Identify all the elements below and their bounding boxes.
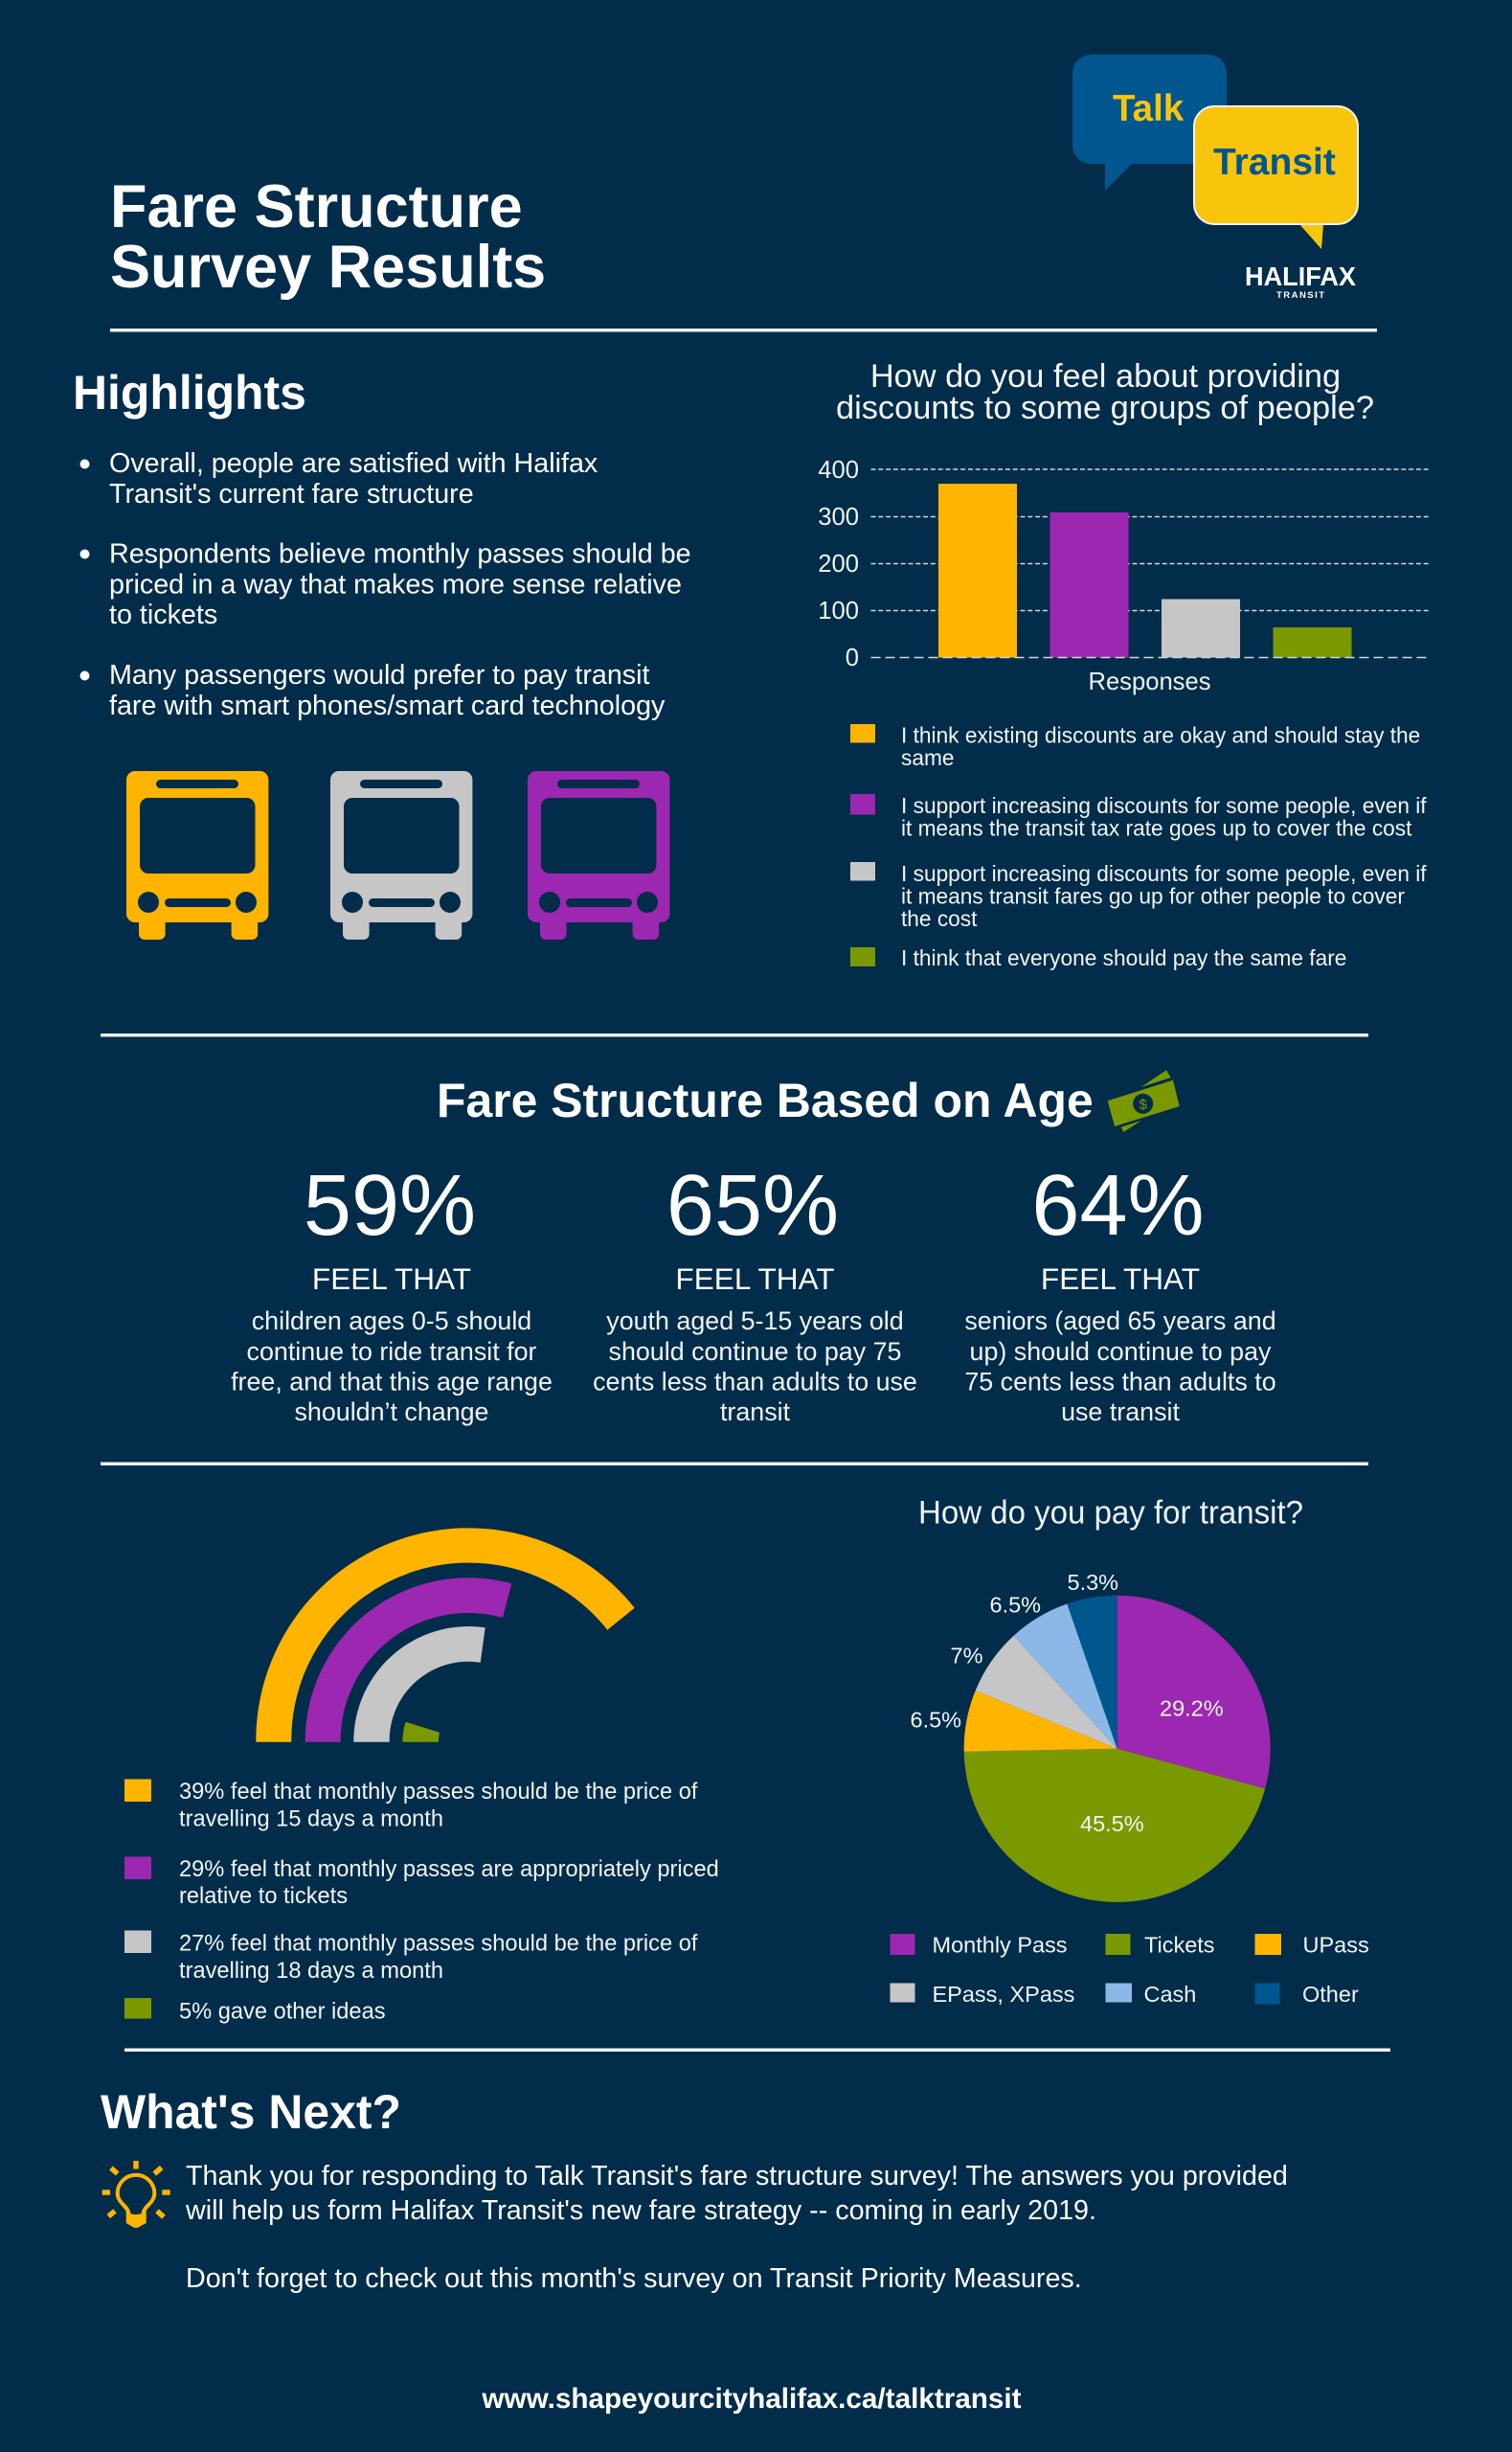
icon: money <box>1108 1070 1180 1132</box>
pie chart: 6.5% <box>990 1592 1041 1617</box>
text block: thank you: Don't forget to check out this month's survey on Transit Priority Measures. <box>186 2263 1082 2294</box>
bullet: smart phones: Many passengers would prefer to pay transit <box>109 660 650 691</box>
heading: Fare Structure Based on Age <box>437 1074 1094 1127</box>
legend: discounts: I think existing discounts are okay and should stay the <box>901 722 1420 747</box>
heading: Highlights: Highlights <box>73 366 306 420</box>
stat: 59%: FEEL THAT <box>312 1261 471 1296</box>
website link: www.shapeyourcityhalifax.ca/talktransit <box>481 2383 1022 2415</box>
legend: monthly pass opinions: travelling 15 days a month <box>179 1806 443 1831</box>
legend: monthly pass opinions: travelling 18 days a month <box>179 1959 443 1984</box>
bullet: smart phones: fare with smart phones/smart card technology <box>109 691 666 721</box>
stat: 65%: 65% <box>666 1158 839 1254</box>
icon: grey bus <box>330 771 472 940</box>
logo: Talk Transit Halifax <box>1072 55 1358 301</box>
legend: monthly pass opinions: 39% feel that monthly passes should be the price of <box>179 1780 698 1805</box>
legend: monthly pass opinions <box>124 1780 719 2025</box>
radial bar chart <box>256 1528 635 1742</box>
stat: 65% <box>593 1158 917 1426</box>
stat: 65%: cents less than adults to use <box>593 1368 917 1396</box>
pie chart: 7% <box>950 1644 983 1669</box>
text block: thank you: will help us form Halifax Transit's new fare strategy -- coming in early 2019. <box>185 2195 1096 2226</box>
text block: thank you: Thank you for responding to Talk Transit's fare structure survey! The answers you provided <box>186 2161 1288 2191</box>
bar chart: 400 <box>818 457 859 484</box>
bar chart <box>818 457 1429 695</box>
stat: 64% <box>964 1158 1276 1426</box>
stat: 59% <box>231 1158 553 1426</box>
legend: monthly pass opinions: 29% feel that monthly passes are appropriately priced <box>179 1857 719 1882</box>
pie chart: 5.3% <box>1067 1570 1118 1595</box>
legend: discounts: the cost <box>901 906 978 931</box>
stat: 64%: up) should continue to pay <box>970 1337 1272 1366</box>
bullet: satisfied: Transit's current fare structure <box>109 479 474 510</box>
legend: payment types <box>891 1933 1369 2007</box>
legend: discounts: I support increasing discounts for some people, even if <box>901 861 1427 886</box>
bullet: monthly passes: Respondents believe monthly passes should be <box>109 538 691 569</box>
legend: discounts: I support increasing discounts for some people, even if <box>901 793 1427 818</box>
bar chart: 300 <box>818 504 859 531</box>
title: Survey Results <box>110 234 546 301</box>
pie chart: 45.5% <box>1080 1811 1144 1836</box>
pie chart: 29.2% <box>1160 1695 1224 1720</box>
icon: money: $ <box>1140 1097 1148 1113</box>
title <box>110 173 546 301</box>
stat: 59%: 59% <box>304 1158 476 1254</box>
stat: 65%: should continue to pay 75 <box>609 1337 901 1366</box>
stat: 59%: shouldn’t change <box>295 1397 488 1426</box>
heading: What's Next? <box>101 2085 401 2139</box>
legend: payment types: UPass <box>1302 1933 1369 1958</box>
bullet: monthly passes: priced in a way that makes more sense relative <box>109 569 682 600</box>
legend: discounts: it means the transit tax rate goes up to cover the cost <box>901 816 1412 841</box>
Halifax Transit wordmark: TRANSIT <box>1276 290 1324 301</box>
pie chart: 6.5% <box>910 1707 961 1732</box>
legend: payment types: Cash <box>1143 1982 1196 2007</box>
bullet: monthly passes: to tickets <box>109 600 217 630</box>
stat: 64%: 75 cents less than adults to <box>964 1368 1276 1396</box>
pie chart <box>910 1570 1271 1902</box>
panel: discounts survey <box>818 358 1429 970</box>
panel: highlights <box>73 366 691 940</box>
chart title: How do you pay for transit? <box>918 1494 1303 1531</box>
speech bubble: Talk: Talk <box>1113 88 1185 129</box>
legend: discounts: same <box>901 745 954 770</box>
bullet: monthly passes <box>80 538 691 630</box>
legend: payment types: EPass, XPass <box>933 1982 1074 2007</box>
legend: payment types: Other <box>1302 1982 1359 2007</box>
legend: discounts <box>850 722 1427 970</box>
bar chart: Responses <box>1088 669 1211 695</box>
stat: 64%: 64% <box>1031 1158 1205 1254</box>
stat: 59%: children ages 0-5 should <box>252 1306 531 1335</box>
bullet: satisfied: Overall, people are satisfied with Halifax <box>109 448 598 479</box>
bullet: smart phones <box>80 660 666 721</box>
speech bubble: Transit: Transit <box>1213 142 1336 183</box>
legend: discounts: it means transit fares go up for other people to cover <box>901 883 1405 908</box>
icon: yellow bus <box>126 771 268 940</box>
stat: 65%: transit <box>720 1397 791 1426</box>
stat: 65%: youth aged 5-15 years old <box>606 1306 904 1335</box>
bar chart: 0 <box>846 645 859 671</box>
chart title: How do you feel about providing <box>870 358 1341 395</box>
Halifax Transit wordmark: HALIFAX <box>1245 261 1356 291</box>
legend: monthly pass opinions: relative to tickets <box>179 1884 348 1909</box>
panel: how do you pay for transit <box>891 1494 1369 2007</box>
chart title: discounts to some groups of people? <box>836 390 1374 426</box>
legend: monthly pass opinions: 5% gave other ideas <box>179 2000 386 2025</box>
stat: 64%: use transit <box>1061 1397 1180 1426</box>
bar chart: 100 <box>818 598 859 624</box>
title: Fare Structure <box>110 173 523 240</box>
bar chart: 200 <box>818 551 859 578</box>
legend: payment types: Monthly Pass <box>933 1933 1068 1958</box>
stat: 59%: continue to ride transit for <box>247 1337 537 1366</box>
text block: thank you <box>185 2161 1288 2294</box>
legend: payment types: Tickets <box>1144 1933 1215 1958</box>
stat: 65%: FEEL THAT <box>675 1261 835 1296</box>
bullet: satisfied <box>80 448 598 510</box>
chart title <box>836 358 1374 426</box>
legend: discounts: I think that everyone should pay the same fare <box>901 945 1346 970</box>
legend: monthly pass opinions: 27% feel that monthly passes should be the price of <box>179 1931 698 1956</box>
stat: 64%: seniors (aged 65 years and <box>964 1306 1276 1335</box>
icon: purple bus <box>528 771 669 940</box>
icon: lightbulb <box>102 2161 170 2228</box>
stat: 64%: FEEL THAT <box>1041 1261 1200 1296</box>
speech bubble: Talk <box>1072 55 1227 191</box>
stat: 59%: free, and that this age range <box>231 1368 553 1396</box>
panel: monthly pass opinions <box>124 1528 719 2025</box>
panel: fare structure based on age <box>231 1070 1276 1426</box>
panel: what's next <box>101 2085 1288 2294</box>
speech bubble: Transit <box>1194 106 1358 249</box>
